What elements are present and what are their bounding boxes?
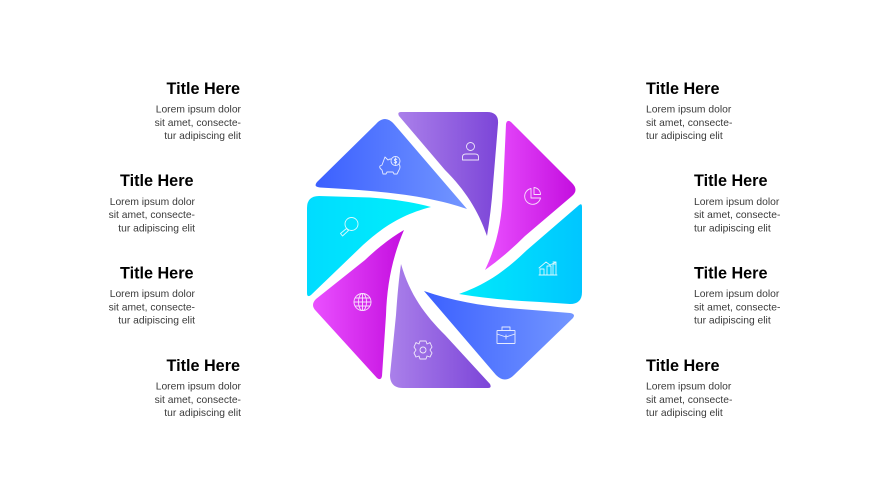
- text: bottom-left: Lorem ipsum dolor: [156, 382, 242, 392]
- text: upper-mid left: sit amet, consecte-: [109, 210, 195, 221]
- text: bottom-left: [155, 357, 242, 419]
- text: top-left: Lorem ipsum dolor: [156, 104, 242, 116]
- text: lower-mid right: tur adipiscing elit: [694, 316, 771, 326]
- text: top-left: Title Here: [167, 80, 240, 98]
- text: bottom-right: Title Here: [646, 357, 719, 375]
- icon: globe: [354, 294, 371, 310]
- icon: briefcase: [497, 327, 515, 344]
- icon: piggy bank: [380, 156, 400, 174]
- text: upper-mid right: Title Here: [694, 172, 767, 190]
- icon: gear: [414, 341, 432, 359]
- text: upper-mid right: [694, 172, 780, 234]
- text: bottom-left: sit amet, consecte-: [155, 395, 241, 406]
- icon: pie chart: [525, 188, 540, 204]
- text: top-right: tur adipiscing elit: [646, 131, 723, 142]
- text: lower-mid right: sit amet, consecte-: [694, 302, 780, 313]
- text: lower-mid right: Title Here: [694, 264, 767, 282]
- text: lower-mid left: Lorem ipsum dolor: [110, 289, 196, 300]
- text: upper-mid left: tur adipiscing elit: [118, 223, 195, 234]
- text: top-left: sit amet, consecte-: [155, 118, 241, 129]
- text: upper-mid right: Lorem ipsum dolor: [694, 197, 780, 208]
- icon: person: [462, 142, 478, 160]
- text: top-right: Lorem ipsum dolor: [646, 104, 732, 116]
- text: bottom-right: [646, 357, 732, 419]
- text: bottom-left: Title Here: [167, 357, 240, 375]
- text: lower-mid right: Lorem ipsum dolor: [694, 289, 780, 300]
- segment: briefcase (blue): [424, 291, 574, 380]
- text: upper-mid left: Lorem ipsum dolor: [110, 197, 196, 208]
- text: lower-mid right: [694, 264, 780, 326]
- text: lower-mid left: [109, 264, 196, 326]
- icon: magnifier: [340, 218, 358, 236]
- text: top-left: [155, 80, 242, 142]
- text: upper-mid left: [109, 172, 196, 234]
- segment: pie chart (magenta): [485, 121, 576, 270]
- text: bottom-right: sit amet, consecte-: [646, 395, 732, 406]
- text: bottom-left: tur adipiscing elit: [164, 408, 241, 419]
- segment: growth chart (cyan): [459, 204, 582, 304]
- text: upper-mid right: tur adipiscing elit: [694, 223, 771, 234]
- text: top-right: [646, 80, 732, 142]
- text: lower-mid left: tur adipiscing elit: [118, 316, 195, 326]
- text: top-left: tur adipiscing elit: [164, 131, 241, 142]
- text: top-right: sit amet, consecte-: [646, 118, 732, 129]
- icon: growth chart: [539, 262, 557, 275]
- text: lower-mid left: Title Here: [120, 264, 194, 282]
- text: bottom-right: tur adipiscing elit: [646, 408, 723, 419]
- text: upper-mid left: Title Here: [120, 172, 194, 190]
- text: lower-mid left: sit amet, consecte-: [109, 302, 195, 313]
- text: upper-mid right: sit amet, consecte-: [694, 210, 780, 221]
- text: bottom-right: Lorem ipsum dolor: [646, 382, 732, 392]
- text: top-right: Title Here: [646, 80, 719, 98]
- segment: gear (purple): [390, 264, 491, 388]
- segment: piggy bank (blue): [316, 119, 467, 209]
- segment: magnifier (cyan): [307, 196, 431, 296]
- segment: globe (magenta): [313, 230, 404, 379]
- segment: person (purple): [398, 112, 498, 236]
